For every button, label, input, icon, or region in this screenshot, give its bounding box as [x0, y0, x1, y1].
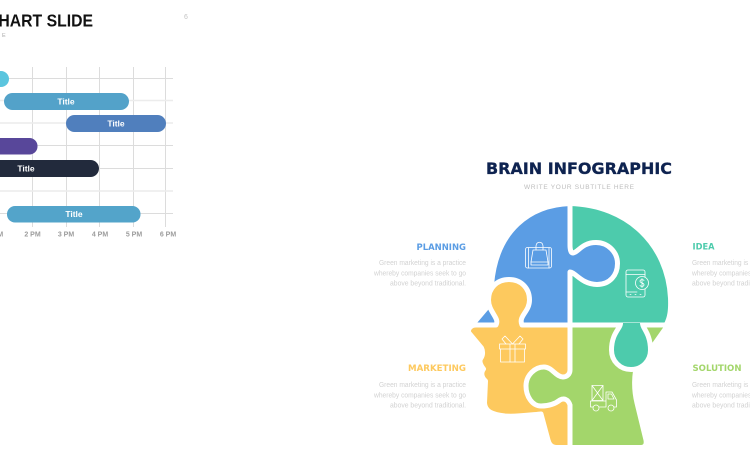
- text block: marketing: above beyond traditional.: [390, 402, 466, 410]
- puzzle knob: teal: [612, 323, 650, 370]
- gantt bar: title 1: Title: [57, 96, 75, 106]
- puzzle piece: green solution: [526, 325, 668, 448]
- icon: shopping bag on tablet: [526, 242, 552, 268]
- gantt bar: title 3: [7, 206, 140, 222]
- text block: idea: IDEA: [692, 242, 715, 252]
- heading: brain infographic: BRAIN INFOGRAPHIC: [486, 159, 672, 178]
- text block: planning: above beyond traditional.: [390, 280, 466, 288]
- time axis labels: [0, 232, 176, 238]
- time axis labels: 3 PM: [58, 232, 74, 238]
- gantt bar: dark title: [0, 160, 99, 177]
- puzzle piece: teal idea: [570, 204, 671, 325]
- text block: solution: SOLUTION: [692, 364, 742, 374]
- subtitle: WRITE YOUR SUBTITLE HERE: [524, 184, 635, 191]
- text block: marketing: MARKETING: [408, 364, 466, 374]
- time axis labels: 4 PM: [92, 232, 108, 238]
- slide subtitle fragment: E: [2, 33, 6, 39]
- text block: marketing: Green marketing is a practice: [379, 382, 466, 389]
- text block: marketing: whereby companies seek to go: [373, 392, 466, 400]
- puzzle head: [468, 204, 671, 448]
- puzzle piece: yellow marketing: [468, 280, 570, 448]
- gantt bar: purple: [0, 138, 38, 154]
- icon: gift box: [500, 336, 526, 362]
- text block: solution: [691, 364, 750, 410]
- text block: planning: PLANNING: [416, 243, 466, 253]
- previous slide: gantt chart slide: [0, 10, 188, 238]
- gantt bar: title 1: [4, 93, 129, 110]
- text block: planning: [373, 243, 466, 288]
- page number: 6: [184, 14, 188, 21]
- gantt bar: cyan: [0, 71, 9, 87]
- time axis labels: 5 PM: [126, 232, 142, 238]
- gantt bar: title 2: [66, 115, 166, 132]
- text block: planning: Green marketing is a practice: [379, 260, 466, 267]
- gantt bar: title 2: Title: [107, 118, 125, 128]
- puzzle piece: blue planning: [472, 204, 618, 325]
- text block: planning: whereby companies seek to go: [373, 270, 466, 278]
- icon: tablet with dollar bubble: [626, 270, 648, 297]
- icon: delivery truck: [590, 386, 616, 411]
- gantt bar: title 3: Title: [65, 209, 83, 219]
- time axis labels: 6 PM: [160, 232, 176, 238]
- text block: idea: [691, 242, 750, 288]
- text block: marketing: [373, 364, 466, 410]
- gantt bar: dark title: Title: [17, 163, 35, 173]
- time axis labels: 2 PM: [24, 232, 41, 238]
